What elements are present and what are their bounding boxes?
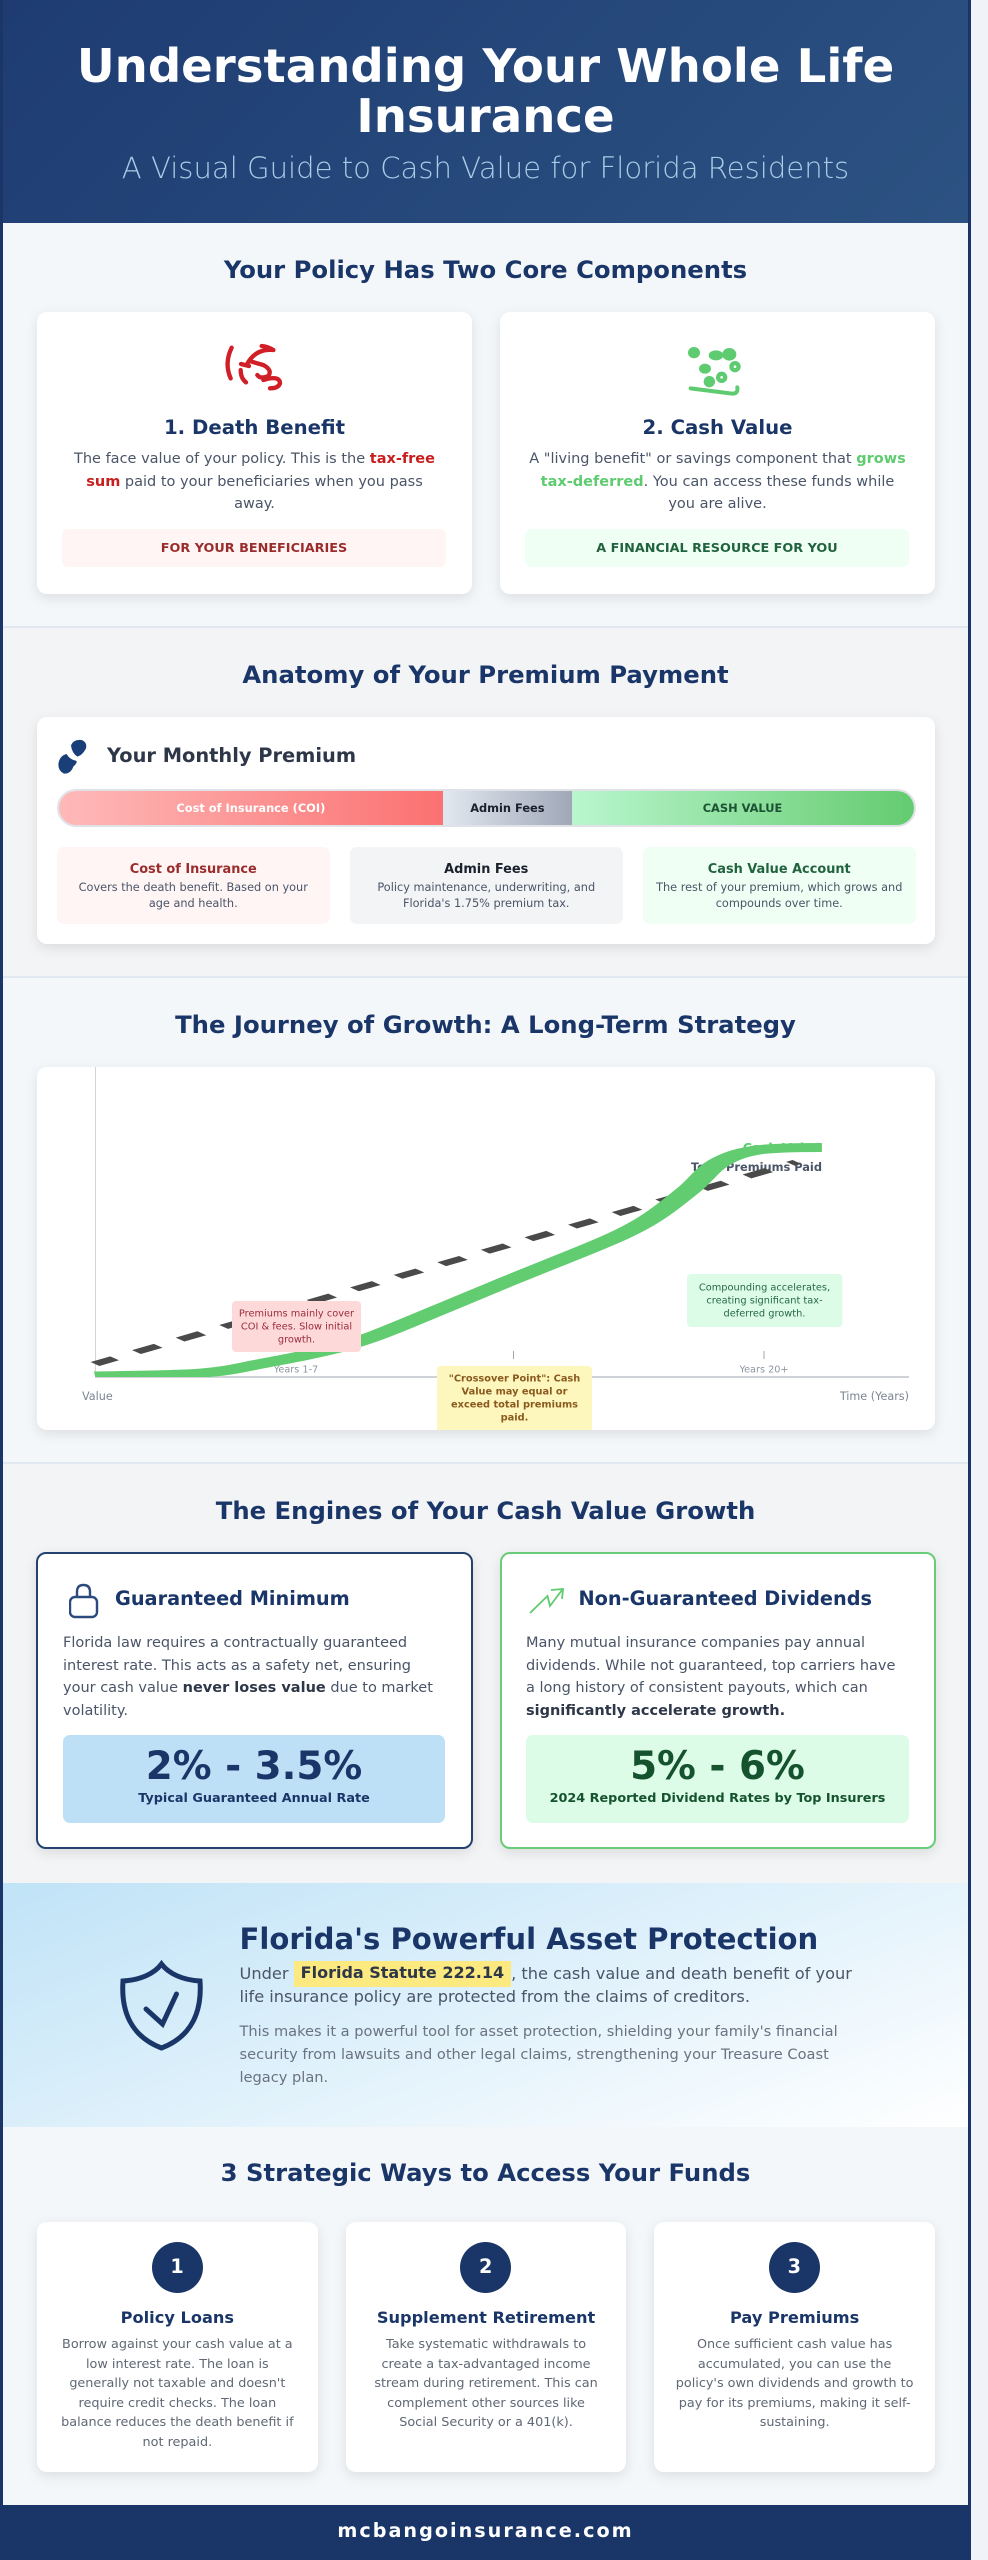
segment: admin fees xyxy=(443,791,572,825)
box: cost of insurance xyxy=(56,847,330,924)
callout: crossover point: paid. xyxy=(501,1412,528,1424)
box text: Covers the death benefit. Based on your xyxy=(79,881,308,894)
box text: age and health. xyxy=(149,897,238,910)
heading: Anatomy of Your Premium Payment xyxy=(242,660,729,689)
card text: Once sufficient cash value has xyxy=(697,2337,892,2352)
box text xyxy=(656,881,902,910)
stat value: 5% - 6% xyxy=(630,1744,805,1789)
line labels: Total Premiums Paid xyxy=(691,1160,822,1174)
card: pay premiums xyxy=(654,2222,935,2472)
segment: cost of insurance: Cost of Insurance (COI) xyxy=(176,801,325,815)
card text: generally not taxable and doesn't xyxy=(69,2376,285,2391)
paragraph: explanation: security from lawsuits and other legal claims, strengthening your Treasure Coast xyxy=(240,2046,829,2063)
paragraph: statute: Under , the cash value and death benefit of your xyxy=(240,1964,852,1983)
number badge xyxy=(460,2242,511,2293)
segment: cost of insurance xyxy=(58,791,443,825)
line labels xyxy=(691,1141,822,1174)
box text: The rest of your premium, which grows and xyxy=(656,881,902,894)
paragraph: explanation: This makes it a powerful tool for asset protection, shielding your family's financial xyxy=(240,2023,838,2040)
card title: Guaranteed Minimum xyxy=(115,1587,350,1610)
heading: 3 Strategic Ways to Access Your Funds xyxy=(221,2158,750,2187)
icon: coins xyxy=(58,740,86,774)
subtitle: A Visual Guide to Cash Value for Florida Residents xyxy=(122,151,849,185)
stat label: Typical Guaranteed Annual Rate xyxy=(138,1791,370,1806)
heading: The Journey of Growth: A Long-Term Strategy xyxy=(175,1010,796,1039)
card text: significantly accelerate growth. xyxy=(526,1703,785,1719)
number badge xyxy=(769,2242,820,2293)
axis labels: Time (Years) xyxy=(839,1390,909,1403)
box text xyxy=(377,881,595,910)
card text: sustaining. xyxy=(760,2415,830,2430)
card: cash value xyxy=(500,312,935,594)
stat: dividend rate xyxy=(526,1735,909,1823)
heading: Florida's Powerful Asset Protection xyxy=(240,1922,818,1956)
icon: lock xyxy=(69,1584,98,1618)
box text: compounds over time. xyxy=(716,897,843,910)
stat value: 2% - 3.5% xyxy=(146,1744,362,1789)
segment: cash value xyxy=(572,791,914,825)
card text: interest rate. This acts as a safety net, ensuring xyxy=(63,1658,411,1674)
box title: Admin Fees xyxy=(444,862,528,877)
card text: not repaid. xyxy=(143,2434,212,2450)
callout: crossover point: Value may equal or xyxy=(462,1386,568,1398)
card text: volatility. xyxy=(63,1703,128,1719)
card text: The face value of your policy. This is the tax-free xyxy=(74,451,435,467)
box text: Florida's 1.75% premium tax. xyxy=(403,897,570,910)
line: total premiums paid xyxy=(95,1162,797,1364)
footer: mcbangoinsurance.com xyxy=(337,2519,634,2542)
section: anatomy of premium xyxy=(0,628,971,978)
callout: crossover point: exceed total premiums xyxy=(451,1400,578,1410)
chart xyxy=(82,1067,909,1430)
tag: for your beneficiaries xyxy=(62,529,446,567)
icon: shield xyxy=(120,1960,203,2051)
section: asset protection xyxy=(0,1883,971,2127)
callout: early years: growth. xyxy=(278,1334,315,1346)
line labels: Cash Value xyxy=(743,1141,822,1156)
paragraph: statute xyxy=(240,1961,852,2006)
heading: Your Policy Has Two Core Components xyxy=(224,255,747,284)
section: engines of growth xyxy=(0,1464,971,1883)
tag: for your beneficiaries: FOR YOUR BENEFICIARIES xyxy=(161,541,347,556)
card text: dividends. While not guaranteed, top carriers have xyxy=(526,1658,895,1674)
card text xyxy=(529,451,906,512)
box: admin fees xyxy=(350,847,623,924)
card text xyxy=(374,2337,598,2430)
icon: death benefit xyxy=(225,344,282,390)
paragraph: explanation xyxy=(239,2023,838,2086)
card title: Policy Loans xyxy=(121,2308,234,2327)
box: cash value account xyxy=(642,847,916,924)
box title: Cost of Insurance xyxy=(130,862,257,877)
card: death benefit xyxy=(37,312,472,594)
card text: require credit checks. The loan xyxy=(78,2396,276,2410)
icon: growth arrow xyxy=(529,1588,564,1614)
tick labels: Years 20+ xyxy=(738,1364,789,1376)
card text: stream during retirement. This can xyxy=(374,2376,598,2391)
card text: Social Security or a 401(k). xyxy=(399,2415,573,2430)
card title: Pay Premiums xyxy=(730,2308,859,2327)
line: cash value xyxy=(95,1148,822,1376)
title: Insurance xyxy=(356,89,615,143)
callout: compounding xyxy=(687,1274,842,1327)
card text: accumulated, you can use the xyxy=(698,2356,891,2372)
card text: low interest rate. The loan is xyxy=(86,2356,269,2372)
callout: early years xyxy=(232,1301,361,1352)
paragraph: statute: Florida Statute 222.14 xyxy=(301,1963,504,1982)
stacked premium bar xyxy=(56,789,916,827)
card: policy loans xyxy=(37,2222,318,2472)
card text: Borrow against your cash value at a xyxy=(62,2337,293,2352)
card text: Florida law requires a contractually guaranteed xyxy=(63,1635,407,1651)
number badge: 1 xyxy=(170,2255,184,2278)
card: supplement retirement xyxy=(346,2222,626,2472)
box text: Policy maintenance, underwriting, and xyxy=(377,881,595,894)
card: guaranteed minimum xyxy=(36,1552,473,1849)
tag: financial resource xyxy=(525,529,909,567)
card title: 1. Death Benefit xyxy=(164,416,345,439)
axis labels: Value xyxy=(82,1390,113,1403)
callout: compounding: creating significant tax- xyxy=(706,1296,823,1306)
card text: Many mutual insurance companies pay annual xyxy=(526,1635,865,1651)
card text: pay for its premiums, making it self- xyxy=(679,2396,910,2410)
number badge xyxy=(152,2242,202,2293)
tag: financial resource: A FINANCIAL RESOURCE FOR YOU xyxy=(596,541,838,556)
card text xyxy=(676,2337,914,2430)
card: non-guaranteed dividends xyxy=(500,1552,936,1849)
card text: policy's own dividends and growth to xyxy=(676,2376,914,2391)
card text: a long history of consistent payouts, which can xyxy=(526,1680,868,1696)
panel: growth chart xyxy=(37,1067,935,1430)
callout: compounding: Compounding accelerates, xyxy=(699,1282,830,1294)
panel title: Your Monthly Premium xyxy=(107,744,356,767)
card title: 2. Cash Value xyxy=(643,416,792,439)
card text xyxy=(526,1635,895,1719)
callout: crossover point xyxy=(437,1366,592,1432)
paragraph: explanation: legacy plan. xyxy=(240,2069,328,2086)
segment: cash value: CASH VALUE xyxy=(703,801,782,815)
panel: monthly premium xyxy=(37,717,935,944)
paragraph: statute: life insurance policy are protected from the claims of creditors. xyxy=(240,1987,750,2006)
icon: cash value xyxy=(688,347,741,396)
card text: you are alive. xyxy=(668,496,767,512)
card text: balance reduces the death benefit if xyxy=(61,2415,294,2430)
callout: crossover point: "Crossover Point": Cash xyxy=(449,1374,580,1384)
card title: Non-Guaranteed Dividends xyxy=(578,1587,872,1610)
card text xyxy=(61,2337,294,2450)
box title: Cash Value Account xyxy=(708,862,851,877)
section: access your funds xyxy=(0,2127,971,2505)
title: Understanding Your Whole Life xyxy=(77,39,894,93)
card text: A "living benefit" or savings component that grows xyxy=(529,451,906,467)
card text: away. xyxy=(234,496,275,512)
card text: Take systematic withdrawals to xyxy=(386,2337,586,2352)
section: journey of growth xyxy=(0,978,971,1464)
footer xyxy=(0,2505,971,2560)
card text: sum paid to your beneficiaries when you pass xyxy=(86,474,423,490)
card text: complement other sources like xyxy=(387,2396,585,2410)
callout: early years: COI & fees. Slow initial xyxy=(241,1322,352,1332)
card text: tax-deferred. You can access these funds while xyxy=(541,474,894,490)
callout: early years: Premiums mainly cover xyxy=(239,1308,355,1320)
stat label: 2024 Reported Dividend Rates by Top Insurers xyxy=(550,1791,885,1806)
segment: admin fees: Admin Fees xyxy=(470,801,545,815)
number badge: 3 xyxy=(788,2255,801,2278)
title xyxy=(77,39,894,143)
number badge: 2 xyxy=(479,2255,492,2278)
tick labels: Years 1-7 xyxy=(273,1364,318,1376)
callout: compounding: deferred growth. xyxy=(724,1308,805,1320)
card text: your cash value never loses value due to market xyxy=(63,1680,433,1696)
tick labels xyxy=(273,1364,789,1376)
heading: The Engines of Your Cash Value Growth xyxy=(216,1496,755,1525)
header banner xyxy=(0,0,971,223)
card title: Supplement Retirement xyxy=(377,2308,595,2327)
section: two core components xyxy=(0,223,971,628)
axis labels xyxy=(82,1390,909,1403)
card text: create a tax-advantaged income xyxy=(382,2356,591,2372)
stat: guaranteed rate xyxy=(63,1735,445,1823)
card text xyxy=(63,1635,433,1719)
box text xyxy=(79,881,308,910)
card text xyxy=(74,451,435,512)
